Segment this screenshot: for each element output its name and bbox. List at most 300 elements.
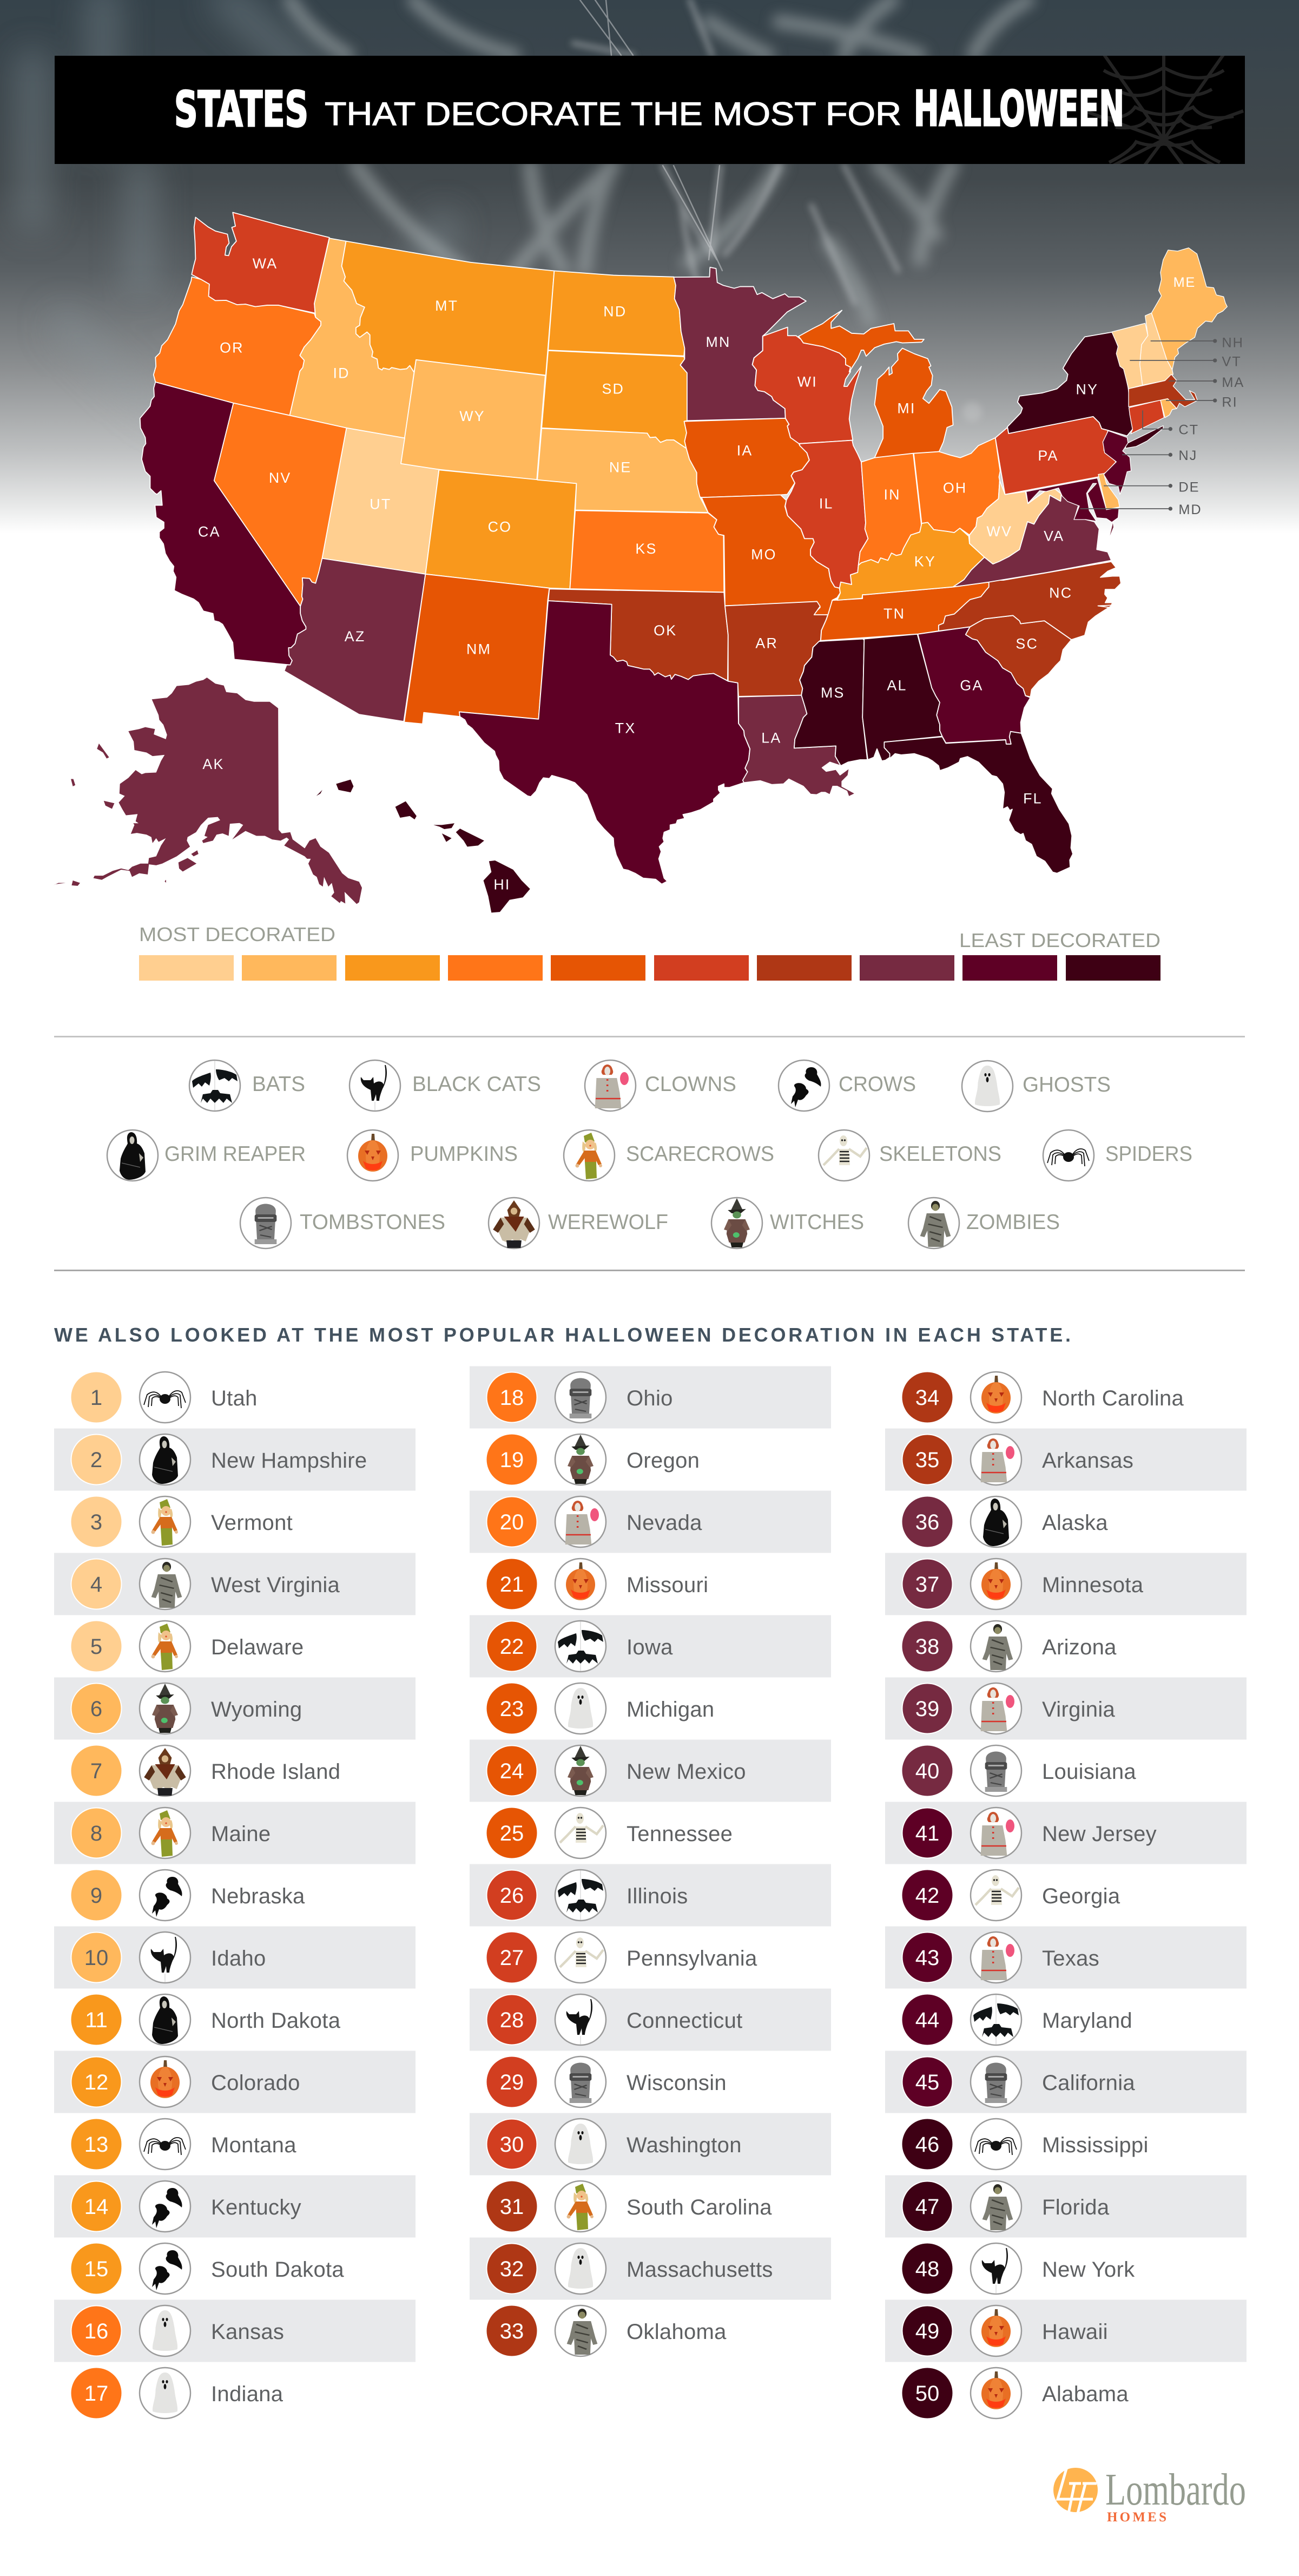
row 10: Idaho: Idaho	[211, 1947, 266, 1970]
state: AK	[53, 678, 362, 904]
ranking list: column 1	[54, 1372, 416, 2419]
row 40: Louisiana: Louisiana	[1042, 1760, 1136, 1784]
state: VT	[1112, 323, 1148, 389]
row 36: Alaska: 36	[915, 1510, 939, 1534]
row 22: Iowa	[470, 1615, 831, 1678]
row 16: Kansas: 16	[84, 2319, 108, 2343]
row 30: Washington: 30	[500, 2133, 524, 2157]
icon: logo mark	[1053, 2468, 1098, 2513]
row 7: Rhode Island: 7	[90, 1759, 102, 1783]
row 5: Delaware	[71, 1621, 304, 1672]
state: OK: OK	[654, 622, 677, 639]
legend label: least decorated: LEAST DECORATED	[959, 929, 1160, 951]
row 22: Iowa: Iowa	[627, 1635, 673, 1659]
row 42: Georgia: 42	[915, 1884, 939, 1908]
callout: VT	[1130, 354, 1242, 370]
callout: DE	[1104, 479, 1200, 495]
row 24: New Mexico	[470, 1739, 831, 1802]
row 32: Massachusetts: Massachusetts	[627, 2258, 773, 2282]
state: MO	[702, 495, 840, 616]
state: MD	[1026, 478, 1119, 522]
state: IL	[785, 441, 868, 588]
callouts: northeast state labels with leader lines	[1080, 336, 1244, 517]
state: NY	[1007, 332, 1133, 436]
row 31: South Carolina: South Carolina	[627, 2196, 772, 2219]
state: AZ	[284, 558, 425, 721]
row 19: Oregon: 19	[500, 1448, 524, 1472]
row 9: Nebraska: 9	[90, 1884, 102, 1908]
row 15: South Dakota: 15	[84, 2257, 108, 2281]
row 12: Colorado: Colorado	[211, 2071, 300, 2095]
state: NH	[1140, 313, 1173, 385]
row 43: Texas	[885, 1927, 1247, 1988]
row 42: Georgia: Georgia	[1042, 1884, 1120, 1908]
row 11: North Dakota	[71, 1994, 341, 2045]
key item: tombstones	[240, 1198, 445, 1248]
state: VA eastern shore	[1108, 521, 1114, 541]
state: NY Long Island	[1125, 426, 1163, 448]
row 6: Wyoming: Wyoming	[211, 1698, 302, 1721]
state: RI	[1160, 398, 1177, 418]
state: NV	[214, 403, 346, 606]
row 23: Michigan	[487, 1683, 714, 1734]
row 14: Kentucky: 14	[84, 2195, 108, 2219]
row 31: South Carolina: 31	[500, 2195, 524, 2219]
state: NY: NY	[1076, 382, 1098, 398]
map group: northeast states	[1026, 248, 1227, 522]
row 2: New Hampshire	[54, 1429, 416, 1490]
state: CO: CO	[488, 519, 512, 535]
row 13: Montana: 13	[84, 2133, 108, 2157]
row 15: South Dakota: South Dakota	[211, 2258, 344, 2282]
state: MI (lower peninsula): MI	[897, 400, 916, 417]
row 35: Arkansas	[885, 1429, 1247, 1490]
row 4: West Virginia: West Virginia	[211, 1573, 340, 1597]
row 17: Indiana	[71, 2368, 283, 2419]
row 4: West Virginia: 4	[90, 1573, 102, 1596]
state: MN: MN	[705, 334, 731, 350]
row 3: Vermont: 3	[90, 1510, 102, 1534]
row 35: Arkansas: Arkansas	[1042, 1449, 1133, 1473]
state: KS	[570, 510, 724, 592]
row 50: Alabama	[902, 2368, 1129, 2419]
state: OH	[914, 438, 1000, 535]
row 25: Tennessee: Tennessee	[627, 1822, 733, 1846]
key item: zombies	[908, 1198, 1060, 1248]
state: FL: FL	[1023, 791, 1043, 807]
state: MN	[674, 267, 806, 420]
row 18: Ohio	[470, 1366, 831, 1429]
row 44: Maryland	[902, 1994, 1132, 2045]
key item: witches: WITCHES	[770, 1211, 864, 1234]
row 22: Iowa: 22	[500, 1635, 524, 1659]
color scale legend	[139, 923, 1160, 981]
row 25: Tennessee: 25	[500, 1822, 524, 1845]
key item: clowns: CLOWNS	[645, 1073, 736, 1096]
state: MA	[1129, 374, 1197, 409]
row 26: Illinois: 26	[500, 1884, 524, 1908]
key item: pumpkins	[347, 1130, 518, 1181]
row 47: Florida	[885, 2176, 1247, 2237]
row 41: New Jersey: New Jersey	[1042, 1822, 1157, 1846]
key item: witches	[711, 1198, 864, 1248]
row 28: Connecticut: Connecticut	[627, 2009, 743, 2033]
state: GA	[918, 627, 1030, 744]
row 18: Ohio: 18	[500, 1386, 524, 1410]
row 7: Rhode Island	[71, 1745, 340, 1796]
row 49: Hawaii: Hawaii	[1042, 2320, 1108, 2344]
row 37: Minnesota: 37	[915, 1573, 939, 1596]
row 34: North Carolina	[902, 1372, 1184, 1423]
row 33: Oklahoma	[487, 2305, 727, 2356]
state: KS: KS	[635, 541, 657, 557]
row 7: Rhode Island: Rhode Island	[211, 1760, 340, 1784]
row 26: Illinois	[470, 1864, 831, 1927]
state: LA: LA	[761, 730, 781, 746]
state: ME	[1151, 248, 1227, 370]
background: blurred spider web photo fading to white	[0, 0, 1299, 536]
row 34: North Carolina: 34	[915, 1386, 939, 1410]
state: IN: IN	[883, 487, 901, 503]
row 38: Arizona: Arizona	[1042, 1635, 1117, 1659]
row 37: Minnesota: Minnesota	[1042, 1573, 1144, 1597]
row 11: North Dakota: North Dakota	[211, 2009, 341, 2033]
state: UT	[322, 428, 439, 574]
row 15: South Dakota	[71, 2243, 344, 2294]
state: TX	[459, 601, 750, 884]
key item: ghosts	[962, 1061, 1111, 1112]
row 9: Nebraska	[71, 1870, 305, 1921]
state: WV	[970, 481, 1061, 564]
state: CO	[425, 470, 576, 589]
callout: NJ	[1122, 448, 1197, 463]
state: MS: MS	[821, 685, 845, 701]
row 44: Maryland: 44	[915, 2008, 939, 2032]
logo: Lombardo Homes	[1053, 2465, 1246, 2525]
key item: crows	[779, 1060, 916, 1111]
wordmark: Lombardo	[1105, 2465, 1246, 2515]
map group: south central states	[459, 589, 828, 884]
state: NM: NM	[466, 641, 491, 658]
row 25: Tennessee	[487, 1808, 733, 1858]
state: IL: IL	[819, 495, 834, 511]
key item: ghosts: GHOSTS	[1023, 1073, 1111, 1096]
row 39: Virginia: Virginia	[1042, 1698, 1116, 1721]
row 28: Connecticut	[470, 1988, 831, 2051]
key item: zombies: ZOMBIES	[966, 1211, 1060, 1234]
state: CA	[140, 382, 306, 665]
state: MT: MT	[435, 298, 458, 314]
state: OK	[548, 589, 728, 681]
row 29: Wisconsin: Wisconsin	[627, 2071, 727, 2095]
key item: clowns	[585, 1060, 736, 1111]
state: LA	[738, 695, 855, 797]
row 23: Michigan: 23	[500, 1697, 524, 1721]
state: NC: NC	[1049, 585, 1072, 601]
row 38: Arizona	[902, 1621, 1117, 1672]
row 27: Pennsylvania: Pennsylvania	[627, 1947, 757, 1970]
state: FL	[884, 732, 1073, 873]
row 36: Alaska: Alaska	[1042, 1511, 1108, 1535]
state: WA	[192, 213, 329, 313]
row 20: Nevada	[470, 1490, 831, 1553]
callout: MD	[1080, 502, 1202, 517]
row 50: Alabama: 50	[915, 2382, 939, 2406]
state: NV: NV	[269, 470, 292, 486]
callout: NH: NH	[1222, 336, 1244, 351]
icon: spider web in title bar	[1087, 56, 1244, 164]
state: CA: CA	[198, 524, 221, 540]
row 43: Texas: 43	[915, 1946, 939, 1970]
state: CT	[1129, 400, 1164, 434]
row 10: Idaho: 10	[84, 1946, 108, 1970]
key item: bats	[189, 1060, 305, 1111]
row 27: Pennsylvania	[487, 1932, 757, 1983]
state: AK: AK	[202, 756, 225, 772]
row 17: Indiana: Indiana	[211, 2382, 283, 2406]
row 20: Nevada: 20	[500, 1510, 524, 1534]
row 46: Mississippi	[902, 2119, 1149, 2170]
map group: plains states	[537, 267, 840, 616]
key item: scarecrows: SCARECROWS	[626, 1142, 774, 1166]
state: WA: WA	[253, 255, 278, 272]
row 12: Colorado: 12	[84, 2071, 108, 2094]
key item: grim reaper	[107, 1130, 306, 1181]
map group: deep south states	[738, 562, 1121, 873]
title bar	[55, 54, 1245, 173]
state: MS	[794, 639, 867, 766]
row 2: New Hampshire: 2	[90, 1448, 102, 1472]
state: PA	[995, 417, 1116, 495]
state: UT: UT	[370, 496, 391, 512]
state: KY: KY	[914, 554, 936, 570]
state: WI: WI	[797, 373, 817, 390]
row 39: Virginia: 39	[915, 1697, 939, 1721]
row 8: Maine: Maine	[211, 1822, 271, 1846]
key item: black cats	[350, 1060, 541, 1111]
state: VA	[953, 495, 1111, 587]
row 48: New York	[902, 2243, 1135, 2294]
state: ID	[290, 238, 414, 438]
state: HI: HI	[493, 877, 511, 893]
row 8: Maine	[54, 1802, 416, 1864]
state: SC: SC	[1016, 635, 1038, 652]
row 11: North Dakota: 11	[85, 2008, 108, 2032]
callout: VT: VT	[1222, 354, 1242, 370]
state: NM	[404, 574, 549, 724]
row 8: Maine: 8	[90, 1822, 102, 1845]
row 30: Washington: Washington	[627, 2133, 742, 2157]
row 13: Montana	[71, 2119, 296, 2170]
state: ID: ID	[333, 365, 350, 381]
title text: THAT DECORATE THE MOST FOR	[325, 96, 901, 132]
state: AL: AL	[887, 677, 907, 693]
state: GA: GA	[960, 677, 984, 693]
row 6: Wyoming	[54, 1678, 416, 1739]
callout: DE: DE	[1178, 479, 1200, 495]
row 2: New Hampshire: New Hampshire	[211, 1449, 367, 1473]
wordmark subtitle: HOMES	[1107, 2510, 1166, 2525]
row 33: Oklahoma: 33	[500, 2319, 524, 2343]
state: IA	[684, 418, 809, 497]
key item: black cats: BLACK CATS	[412, 1073, 541, 1096]
row 21: Missouri: 21	[500, 1573, 524, 1596]
state: NJ	[1103, 431, 1131, 494]
key item: werewolf	[489, 1198, 668, 1248]
key item: grim reaper: GRIM REAPER	[164, 1142, 306, 1166]
callout: CT	[1143, 410, 1199, 437]
row 39: Virginia	[885, 1678, 1247, 1739]
row 45: California	[885, 2051, 1247, 2113]
state: ND: ND	[603, 303, 627, 319]
key item: scarecrows	[564, 1130, 774, 1181]
row 3: Vermont: Vermont	[211, 1511, 293, 1535]
state: AR	[725, 601, 828, 696]
row 24: New Mexico: 24	[500, 1759, 524, 1783]
ranking list: column 2	[470, 1366, 831, 2356]
state: NC	[939, 562, 1121, 640]
state: HI	[316, 779, 530, 912]
panel: decoration icon key	[107, 1060, 1192, 1248]
row 32: Massachusetts: 32	[500, 2257, 524, 2281]
row 5: Delaware: Delaware	[211, 1635, 304, 1659]
key item: spiders: SPIDERS	[1105, 1142, 1192, 1166]
row 26: Illinois: Illinois	[627, 1884, 688, 1908]
row 50: Alabama: Alabama	[1042, 2382, 1129, 2406]
heading: most popular decoration: WE ALSO LOOKED AT THE MOST POPULAR HALLOWEEN DECORATION IN EACH STATE.	[54, 1324, 1071, 1346]
row 47: Florida: 47	[915, 2195, 939, 2219]
row 21: Missouri	[487, 1559, 708, 1609]
state: IN	[859, 454, 922, 565]
row 24: New Mexico: New Mexico	[627, 1760, 746, 1784]
legend label: most decorated: MOST DECORATED	[139, 923, 335, 945]
key item: skeletons	[819, 1130, 1001, 1181]
key item: tombstones: TOMBSTONES	[300, 1211, 445, 1234]
row 1: Utah	[71, 1372, 258, 1423]
row 29: Wisconsin	[487, 2056, 727, 2107]
row 34: North Carolina: North Carolina	[1042, 1386, 1184, 1410]
state: SD	[542, 351, 687, 449]
state: DE	[1098, 474, 1119, 510]
map: choropleth of US states	[53, 213, 1244, 912]
row 42: Georgia	[902, 1870, 1120, 1921]
row 9: Nebraska: Nebraska	[211, 1884, 305, 1908]
state: WY: WY	[459, 408, 485, 424]
callout: CT: CT	[1178, 422, 1199, 437]
row 4: West Virginia	[54, 1553, 416, 1615]
state: KY	[837, 522, 985, 600]
state: PA: PA	[1038, 448, 1059, 464]
state: SC	[966, 615, 1071, 697]
row 1: Utah: Utah	[211, 1386, 258, 1410]
row 38: Arizona: 38	[915, 1635, 939, 1659]
row 17: Indiana: 17	[84, 2382, 108, 2406]
row 1: Utah: 1	[90, 1386, 102, 1410]
row 16: Kansas	[54, 2300, 416, 2362]
callout: NJ: NJ	[1178, 448, 1197, 463]
title text: HALLOWEEN	[914, 81, 1124, 137]
row 41: New Jersey	[885, 1802, 1247, 1864]
row 45: California: 45	[915, 2071, 939, 2094]
row 36: Alaska	[902, 1496, 1108, 1547]
state: WI	[753, 327, 861, 444]
state: TX: TX	[615, 720, 636, 737]
row 33: Oklahoma: Oklahoma	[627, 2320, 727, 2344]
key item: skeletons: SKELETONS	[879, 1142, 1001, 1166]
state: OR	[154, 277, 321, 416]
state: OR: OR	[220, 339, 244, 356]
callout: RI: RI	[1222, 395, 1238, 410]
row 45: California: California	[1042, 2071, 1135, 2095]
callout: MA	[1169, 375, 1244, 390]
state: NE	[537, 429, 708, 512]
row 12: Colorado	[54, 2051, 416, 2113]
row 48: New York: 48	[915, 2257, 939, 2281]
row 30: Washington	[470, 2113, 831, 2176]
row 40: Louisiana	[902, 1745, 1136, 1796]
row 18: Ohio: Ohio	[627, 1386, 673, 1410]
row 46: Mississippi: 46	[915, 2133, 939, 2157]
state: IA: IA	[737, 443, 753, 459]
key item: spiders	[1043, 1130, 1192, 1181]
state: ND	[548, 271, 684, 356]
row 13: Montana: Montana	[211, 2133, 296, 2157]
state: SD: SD	[602, 380, 624, 397]
state: ME: ME	[1173, 275, 1196, 290]
state: MI (upper peninsula)	[799, 310, 924, 372]
key item: crows: CROWS	[839, 1073, 916, 1096]
row 23: Michigan: Michigan	[627, 1698, 714, 1721]
state: AZ: AZ	[345, 628, 365, 645]
row 35: Arkansas: 35	[915, 1448, 939, 1472]
title text: STATES	[174, 81, 308, 138]
row 19: Oregon	[487, 1434, 700, 1485]
state: VA: VA	[1044, 528, 1064, 544]
row 19: Oregon: Oregon	[627, 1449, 700, 1473]
row 32: Massachusetts	[470, 2237, 831, 2300]
row 6: Wyoming: 6	[90, 1697, 102, 1721]
key item: werewolf: WEREWOLF	[548, 1211, 668, 1234]
row 47: Florida: Florida	[1042, 2196, 1110, 2219]
state: TN: TN	[883, 606, 905, 622]
state: MO: MO	[751, 547, 777, 563]
callout: NH	[1151, 336, 1244, 351]
row 49: Hawaii	[885, 2300, 1247, 2362]
row 43: Texas: Texas	[1042, 1947, 1099, 1970]
title text	[174, 81, 1124, 138]
state: NE: NE	[609, 459, 632, 475]
state: AR: AR	[755, 635, 778, 652]
row 41: New Jersey: 41	[915, 1822, 939, 1845]
row 27: Pennsylvania: 27	[500, 1946, 524, 1970]
map group: western states	[140, 213, 576, 724]
ranking list: column 3	[885, 1372, 1247, 2419]
row 29: Wisconsin: 29	[500, 2071, 524, 2094]
row 46: Mississippi: Mississippi	[1042, 2133, 1149, 2157]
row 14: Kentucky	[54, 2176, 416, 2237]
row 37: Minnesota	[885, 1553, 1247, 1615]
row 3: Vermont	[71, 1496, 293, 1547]
key item: bats: BATS	[252, 1073, 305, 1096]
legend swatches	[139, 955, 1160, 981]
callout: MD: MD	[1178, 502, 1202, 517]
state: WV: WV	[987, 523, 1012, 540]
callout: MA: MA	[1222, 375, 1244, 390]
state: MT	[342, 241, 554, 375]
row 31: South Carolina	[487, 2181, 772, 2232]
row 49: Hawaii: 49	[915, 2319, 939, 2343]
row 10: Idaho	[54, 1927, 416, 1988]
